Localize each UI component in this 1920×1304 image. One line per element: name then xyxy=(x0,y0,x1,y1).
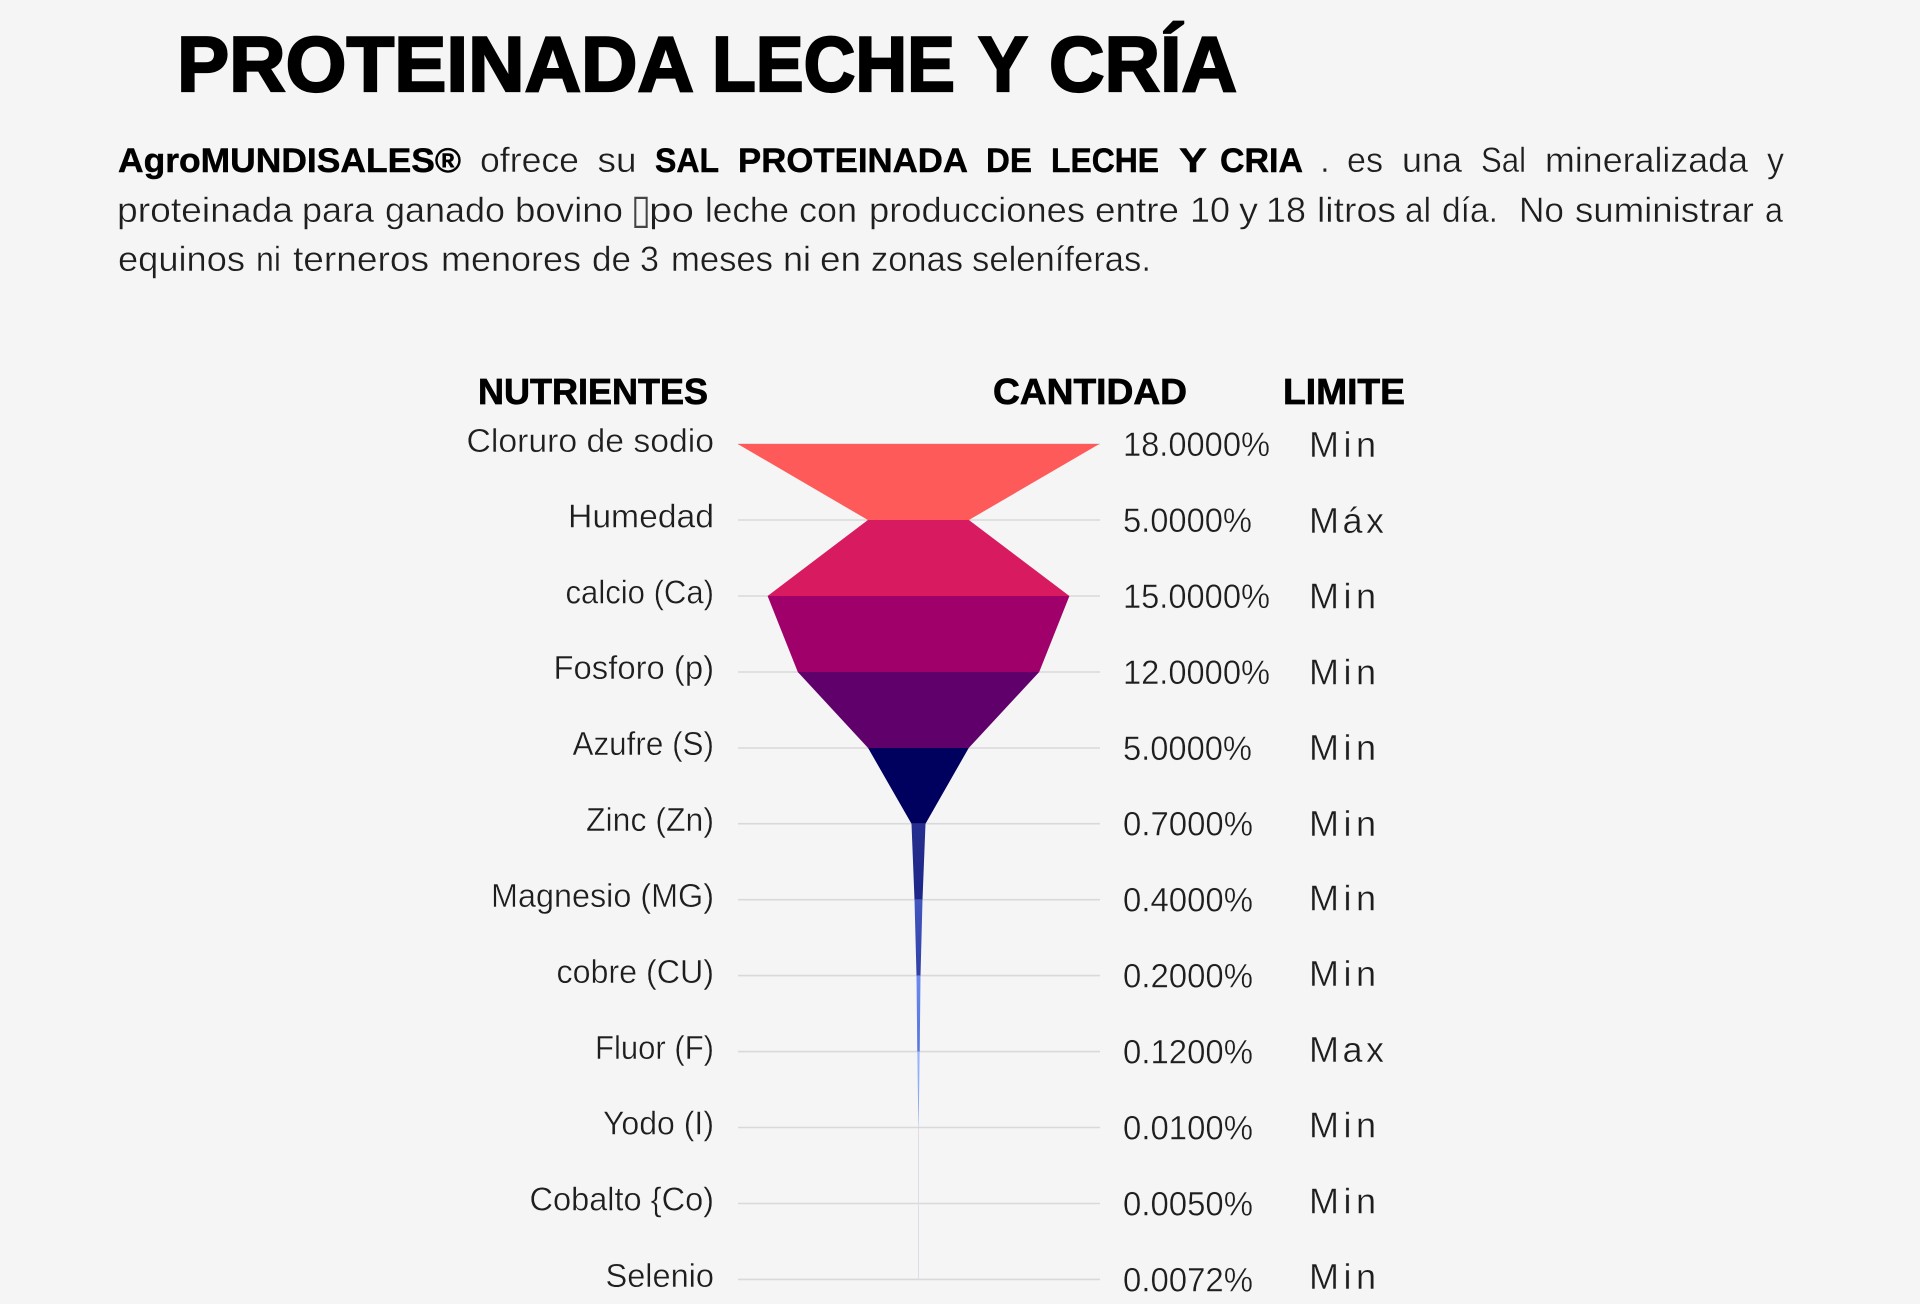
limit labels: Min xyxy=(1309,727,1376,768)
intro paragraph: en xyxy=(820,240,861,279)
intro paragraph: ni xyxy=(256,240,281,279)
intro paragraph: No xyxy=(1519,191,1564,230)
intro paragraph: ▯ xyxy=(631,185,651,233)
quantity values: 5.0000% xyxy=(1123,730,1252,768)
nutrient labels: Yodo (I) xyxy=(603,1104,714,1142)
intro paragraph: su xyxy=(598,141,636,180)
intro paragraph: entre xyxy=(1095,191,1179,230)
title: CRÍA xyxy=(1049,20,1237,108)
quantity values: 15.0000% xyxy=(1123,578,1270,616)
intro paragraph: terneros xyxy=(293,240,429,279)
intro paragraph: DE xyxy=(986,142,1032,180)
funnel chart xyxy=(738,444,1100,1279)
intro paragraph: CRIA xyxy=(1220,142,1303,180)
nutrient labels: Humedad xyxy=(568,498,714,534)
quantity values: 0.1200% xyxy=(1123,1034,1253,1072)
intro paragraph: bovino xyxy=(515,191,623,230)
intro paragraph: una xyxy=(1402,141,1463,180)
intro paragraph: LECHE xyxy=(1051,142,1159,180)
nutrient labels: Cloruro de sodio xyxy=(466,422,714,459)
quantity values: 18.0000% xyxy=(1123,426,1270,464)
intro paragraph: ganado xyxy=(385,191,505,230)
limit labels xyxy=(1309,424,1384,1297)
intro paragraph: proteinada xyxy=(117,191,294,230)
nutrient labels: Fosforo (p) xyxy=(554,649,714,686)
intro paragraph: ni xyxy=(783,240,811,279)
intro paragraph: al xyxy=(1405,191,1431,230)
quantity values xyxy=(1123,426,1270,1300)
intro paragraph: Y xyxy=(1179,142,1207,180)
intro paragraph: meses xyxy=(671,240,773,279)
limit labels: Min xyxy=(1309,1104,1376,1146)
nutrient labels: Cobalto {Co) xyxy=(530,1180,714,1218)
limit labels: Min xyxy=(1309,953,1376,994)
limit labels: Min xyxy=(1309,803,1376,844)
column headings: LIMITE xyxy=(1283,371,1405,412)
intro paragraph: leche xyxy=(705,191,789,230)
quantity values: 0.0072% xyxy=(1123,1262,1253,1300)
quantity values: 0.0100% xyxy=(1123,1110,1253,1148)
title: PROTEINADA xyxy=(177,20,694,108)
intro paragraph: mineralizada xyxy=(1545,141,1749,180)
intro paragraph: zonas xyxy=(871,240,963,279)
nutrient labels: Azufre (S) xyxy=(572,725,714,762)
intro paragraph: y xyxy=(1767,141,1784,180)
nutrient labels: calcio (Ca) xyxy=(566,574,714,610)
intro paragraph: a xyxy=(1765,191,1783,230)
nutrient labels: Magnesio (MG) xyxy=(491,877,714,914)
intro paragraph: suministrar xyxy=(1575,191,1754,230)
limit labels: Min xyxy=(1309,424,1376,465)
title: LECHE xyxy=(712,20,955,108)
quantity values: 5.0000% xyxy=(1123,502,1252,540)
intro paragraph: po xyxy=(649,191,694,230)
intro paragraph: menores xyxy=(441,240,581,279)
intro paragraph xyxy=(117,141,1784,279)
intro paragraph: con xyxy=(799,191,857,230)
intro paragraph: y xyxy=(1239,191,1259,230)
intro paragraph: de xyxy=(592,240,631,279)
nutrient labels: Selenio xyxy=(606,1257,714,1294)
intro paragraph: día. xyxy=(1442,191,1498,230)
quantity values: 0.7000% xyxy=(1123,806,1253,844)
quantity values: 12.0000% xyxy=(1123,654,1270,692)
intro paragraph: litros xyxy=(1317,191,1396,230)
intro paragraph: 3 xyxy=(640,240,659,279)
nutrient labels xyxy=(466,422,714,1294)
intro paragraph: ofrece xyxy=(480,141,579,180)
nutrient labels: cobre (CU) xyxy=(556,953,714,990)
intro paragraph: es xyxy=(1347,141,1383,180)
title xyxy=(177,20,1237,108)
quantity values: 0.2000% xyxy=(1123,958,1253,996)
limit labels: Min xyxy=(1309,652,1376,692)
intro paragraph: 10 xyxy=(1190,191,1230,230)
limit labels: Min xyxy=(1309,878,1376,918)
intro paragraph: . xyxy=(1320,141,1330,180)
limit labels: Máx xyxy=(1309,500,1384,541)
limit labels: Min xyxy=(1309,1180,1376,1222)
intro paragraph: SAL xyxy=(655,142,719,180)
limit labels: Min xyxy=(1309,1256,1376,1297)
quantity values: 0.0050% xyxy=(1123,1186,1253,1224)
intro paragraph: AgroMUNDISALES® xyxy=(118,142,461,180)
intro paragraph: para xyxy=(302,191,375,230)
nutrient labels: Fluor (F) xyxy=(595,1029,714,1066)
intro paragraph: seleníferas. xyxy=(972,240,1151,279)
intro paragraph: Sal xyxy=(1481,141,1526,180)
intro paragraph: 18 xyxy=(1266,191,1306,230)
intro paragraph: producciones xyxy=(869,191,1085,230)
column headings xyxy=(478,371,1405,412)
column headings: CANTIDAD xyxy=(993,371,1187,412)
column headings: NUTRIENTES xyxy=(478,371,708,412)
limit labels: Max xyxy=(1309,1029,1384,1070)
nutrient labels: Zinc (Zn) xyxy=(586,801,714,838)
intro paragraph: PROTEINADA xyxy=(738,142,968,180)
quantity values: 0.4000% xyxy=(1123,882,1253,920)
limit labels: Min xyxy=(1309,576,1376,616)
title: Y xyxy=(978,20,1028,108)
intro paragraph: equinos xyxy=(118,240,245,279)
